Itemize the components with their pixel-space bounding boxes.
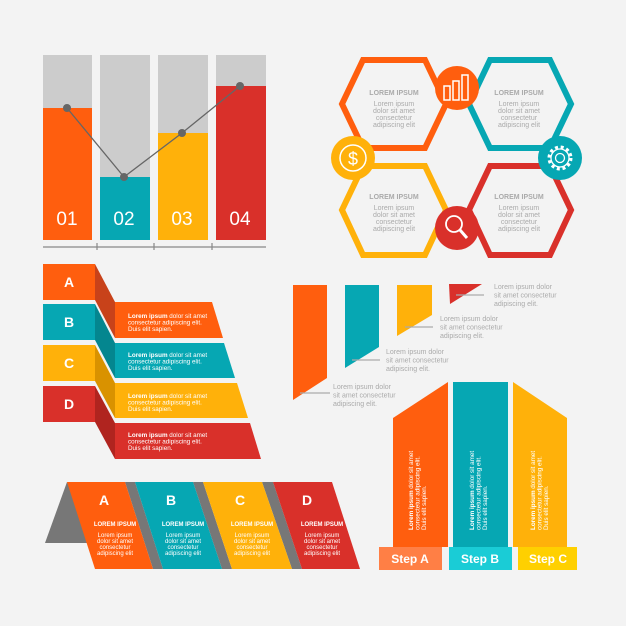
stair list A-D: A bbox=[64, 274, 74, 290]
hexagon diagram: Lorem ipsum bbox=[499, 101, 539, 108]
stair list A-D: consectetur adipiscing elit. bbox=[128, 320, 202, 326]
hexagon diagram: dolor sit amet bbox=[373, 212, 415, 219]
steps A-C bbox=[379, 382, 577, 570]
folded ribbon A-D: LOREM IPSUM bbox=[301, 522, 343, 528]
hexagon diagram: dolor sit amet bbox=[498, 212, 540, 219]
hexagon diagram: consectetur bbox=[501, 115, 538, 122]
stair list A-D: C bbox=[64, 355, 74, 371]
steps A-C: Step A bbox=[391, 552, 429, 566]
stair list A-D: consectetur adipiscing elit. bbox=[128, 358, 202, 366]
hexagon diagram: Lorem ipsum bbox=[499, 205, 539, 212]
folded ribbon A-D: Lorem ipsum bbox=[98, 533, 132, 539]
hexagon diagram bbox=[331, 60, 582, 255]
hexagon diagram: consectetur bbox=[376, 115, 413, 122]
folded ribbon A-D: consectetur bbox=[99, 545, 131, 551]
icon: dollar bbox=[331, 136, 375, 180]
folded ribbon A-D: dolor sit amet bbox=[234, 539, 270, 545]
icon: dollar: $ bbox=[348, 149, 358, 169]
bar chart bbox=[43, 55, 266, 250]
steps A-C: consectetur adipiscing elit. bbox=[536, 456, 544, 530]
folded ribbon A-D: dolor sit amet bbox=[165, 539, 201, 545]
folded ribbon A-D: consectetur bbox=[167, 545, 199, 551]
hexagon diagram: adipiscing elit bbox=[373, 226, 415, 233]
flag bars with callouts: sit amet consectetur bbox=[494, 292, 557, 300]
stair list A-D: Duis elit sapien. bbox=[128, 406, 173, 413]
folded ribbon A-D: Lorem ipsum bbox=[166, 533, 200, 539]
flag bars with callouts: adipiscing elit. bbox=[386, 366, 430, 373]
bar chart: 01 bbox=[56, 209, 78, 230]
folded ribbon A-D: Lorem ipsum bbox=[305, 533, 339, 539]
folded ribbon A-D: D bbox=[302, 492, 312, 508]
steps A-C: Lorem ipsum dolor sit amet bbox=[408, 451, 415, 530]
flag bars with callouts bbox=[293, 284, 557, 408]
flag bars with callouts: Lorem ipsum dolor bbox=[386, 349, 445, 356]
hexagon diagram: Lorem ipsum bbox=[374, 101, 414, 108]
steps A-C: Duis elit sapien. bbox=[421, 485, 428, 530]
hexagon diagram: consectetur bbox=[376, 219, 413, 226]
bar chart: 03 bbox=[171, 209, 193, 230]
folded ribbon A-D: C bbox=[235, 492, 245, 508]
flag bars with callouts: adipiscing elit. bbox=[440, 333, 484, 340]
stair list A-D: Lorem ipsum dolor sit amet bbox=[128, 313, 207, 320]
hexagon diagram: LOREM IPSUM bbox=[494, 194, 544, 201]
steps A-C: Duis elit sapien. bbox=[482, 485, 489, 530]
stair list A-D: B bbox=[64, 314, 74, 330]
folded ribbon A-D bbox=[45, 482, 360, 569]
folded ribbon A-D: dolor sit amet bbox=[304, 539, 340, 545]
folded ribbon A-D: LOREM IPSUM bbox=[231, 522, 273, 528]
folded ribbon A-D: dolor sit amet bbox=[97, 539, 133, 545]
flag bars with callouts: Lorem ipsum dolor bbox=[440, 316, 499, 323]
bar chart: 04 bbox=[229, 209, 251, 230]
stair list A-D: Duis elit sapien. bbox=[128, 365, 173, 372]
stair list A-D: Lorem ipsum dolor sit amet bbox=[128, 393, 207, 400]
hexagon diagram: consectetur bbox=[501, 219, 538, 226]
stair list A-D: consectetur adipiscing elit. bbox=[128, 400, 202, 406]
steps A-C: Duis elit sapien. bbox=[543, 485, 550, 530]
stair list A-D: Duis elit sapien. bbox=[128, 326, 173, 333]
hexagon diagram: adipiscing elit bbox=[498, 226, 540, 233]
hexagon diagram: adipiscing elit bbox=[498, 122, 540, 129]
folded ribbon A-D: consectetur bbox=[236, 545, 268, 551]
hexagon diagram: adipiscing elit bbox=[373, 122, 415, 129]
flag bars with callouts: Lorem ipsum dolor bbox=[494, 284, 553, 291]
folded ribbon A-D: consectetur bbox=[306, 545, 338, 551]
steps A-C: Step C bbox=[529, 552, 567, 566]
stair list A-D: consectetur adipiscing elit. bbox=[128, 438, 202, 446]
folded ribbon A-D: B bbox=[166, 492, 176, 508]
steps A-C: Lorem ipsum dolor sit amet bbox=[469, 451, 476, 530]
folded ribbon A-D: adipiscing elit bbox=[234, 551, 270, 557]
icon: magnifier bbox=[435, 206, 479, 250]
stair list A-D: D bbox=[64, 396, 74, 412]
folded ribbon A-D: adipiscing elit bbox=[165, 551, 201, 557]
folded ribbon A-D: LOREM IPSUM bbox=[162, 522, 204, 528]
flag bars with callouts: adipiscing elit. bbox=[494, 301, 538, 308]
steps A-C: Step B bbox=[461, 552, 499, 566]
folded ribbon A-D: A bbox=[99, 492, 109, 508]
stair list A-D bbox=[43, 264, 261, 459]
flag bars with callouts: sit amet consectetur bbox=[440, 324, 503, 332]
folded ribbon A-D: adipiscing elit bbox=[304, 551, 340, 557]
steps A-C: consectetur adipiscing elit. bbox=[414, 456, 422, 530]
stair list A-D: Lorem ipsum dolor sit amet bbox=[128, 432, 207, 439]
hexagon diagram: dolor sit amet bbox=[498, 108, 540, 115]
hexagon diagram: LOREM IPSUM bbox=[369, 90, 419, 97]
folded ribbon A-D: LOREM IPSUM bbox=[94, 522, 136, 528]
flag bars with callouts: Lorem ipsum dolor bbox=[333, 384, 392, 391]
hexagon diagram: LOREM IPSUM bbox=[494, 90, 544, 97]
folded ribbon A-D: Lorem ipsum bbox=[235, 533, 269, 539]
folded ribbon A-D: adipiscing elit bbox=[97, 551, 133, 557]
steps A-C: consectetur adipiscing elit. bbox=[476, 456, 482, 530]
icon: bar chart bbox=[435, 66, 479, 110]
steps A-C: Lorem ipsum dolor sit amet bbox=[530, 451, 537, 530]
flag bars with callouts: sit amet consectetur bbox=[333, 392, 396, 400]
icon: gear bbox=[538, 136, 582, 180]
flag bars with callouts: adipiscing elit. bbox=[333, 401, 377, 408]
flag bars with callouts: sit amet consectetur bbox=[386, 358, 449, 364]
stair list A-D: Duis elit sapien. bbox=[128, 445, 173, 452]
bar chart: 02 bbox=[113, 209, 135, 230]
hexagon diagram: dolor sit amet bbox=[373, 108, 415, 115]
hexagon diagram: LOREM IPSUM bbox=[369, 194, 419, 201]
hexagon diagram: Lorem ipsum bbox=[374, 205, 414, 212]
stair list A-D: Lorem ipsum dolor sit amet bbox=[128, 352, 207, 359]
